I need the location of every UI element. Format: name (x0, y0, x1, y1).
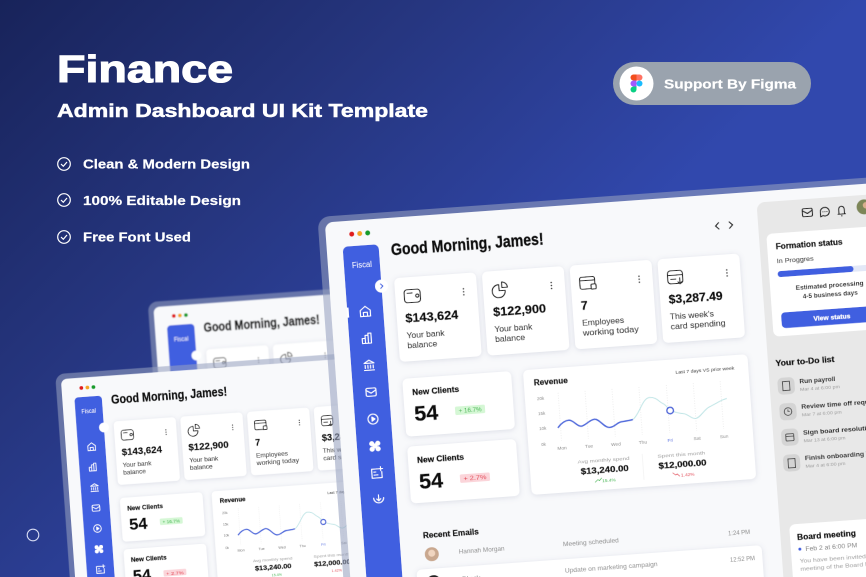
card: formation status: In Proggres (777, 256, 815, 265)
header icons (802, 206, 846, 219)
y axis labels: 10k (539, 426, 547, 431)
x axis labels: Fri (667, 438, 673, 444)
title: Finance (57, 49, 233, 91)
stat: spent this month (657, 450, 708, 480)
card: new clients up (402, 371, 515, 437)
panel: sidebar (342, 244, 413, 577)
panel: middle dashboard preview: Employees (256, 450, 288, 460)
panel: middle dashboard preview: Revenue (219, 496, 246, 505)
panel: middle dashboard preview: Fiscal (81, 408, 96, 416)
todo: time off (779, 396, 866, 421)
icon: figma logo (630, 74, 642, 92)
x axis labels: Thu (639, 440, 648, 446)
panel: middle dashboard preview: $12,000.00 (314, 559, 352, 568)
panel: middle dashboard preview: Wed (278, 546, 286, 550)
heading: greeting: Good Morning, James! (390, 229, 544, 259)
panel: middle dashboard preview: Sun (361, 540, 368, 544)
card: board meeting: Feb 2 at 6:00 PM (805, 543, 858, 553)
y axis labels: 15k (538, 411, 546, 416)
subtitle: Admin Dashboard UI Kit Template (57, 100, 428, 121)
todo: onboarding: Mar 4 at 6:00 pm (805, 461, 846, 470)
stat card: employees: 7 (580, 298, 588, 313)
panel: middle dashboard preview: Good Morning, James! (111, 384, 228, 407)
panel: middle dashboard preview: Tue (258, 547, 265, 551)
todo: board resolution (781, 423, 866, 446)
panel: middle dashboard preview: This week's (323, 446, 356, 455)
panel: middle dashboard preview: Spent this month (313, 552, 350, 559)
window control dots (349, 230, 370, 237)
button: view status: View status (813, 313, 851, 323)
x axis labels: Sat (693, 436, 702, 442)
card: new clients up: + 16.7% (458, 407, 483, 415)
nav arrows (715, 221, 733, 230)
panel: middle dashboard preview: 7 (255, 437, 261, 448)
stat: avg monthly spend: Avg monthly spend (577, 456, 630, 465)
card: new clients down: 54 (418, 469, 444, 494)
email row 2 (416, 545, 764, 577)
panel: middle dashboard preview: card spending (323, 453, 365, 462)
stat card: card spending: $3,287.49 (668, 289, 723, 307)
to-do items (777, 371, 866, 472)
stat: spent this month: Spent this month (657, 450, 706, 459)
y axis labels: 20k (537, 396, 545, 401)
panel: middle dashboard preview: New Clients (131, 554, 168, 564)
sidebar toggle (375, 279, 388, 293)
panel: middle dashboard preview: Last 7 days VS prior week (327, 488, 372, 495)
progress bar (777, 264, 866, 277)
stat card: bank balance: balance (407, 339, 438, 350)
y axis labels: 0k (541, 442, 547, 447)
stat card: bank balance 2: balance (495, 333, 526, 344)
panel: middle dashboard preview: Sat (341, 541, 347, 546)
panel: middle dashboard preview: 54 (129, 516, 148, 534)
panel: middle dashboard preview (55, 350, 414, 577)
y axis labels (537, 396, 548, 447)
stat card: bank balance 2: Your bank (494, 322, 534, 334)
stat: avg monthly spend: 15.4% (602, 477, 617, 484)
feature: free font: Free Font Used (83, 230, 191, 245)
chart marker (667, 407, 674, 414)
card: new clients up: New Clients (412, 385, 460, 397)
panel: middle dashboard preview: + 16.7% (162, 519, 180, 525)
card: formation status: Formation status (775, 238, 843, 251)
card: board meeting (789, 516, 866, 577)
window background (325, 180, 866, 577)
email row 1: Hannah Morgan (459, 546, 505, 556)
window frame (317, 174, 866, 577)
panel: back dashboard preview: Fiscal (174, 336, 189, 344)
todo: onboarding (783, 448, 866, 472)
stat card: bank balance 2: $122,900 (493, 301, 547, 319)
panel: middle dashboard preview: Fri (321, 543, 326, 547)
panel: main dashboard (317, 173, 866, 577)
todo: board resolution: Mar 13 at 6:00 pm (803, 435, 846, 444)
stat card: employees: Employees (582, 316, 624, 328)
panel: middle dashboard preview: $3,287.49 (321, 430, 363, 443)
stat card: bank balance: $143,624 (405, 308, 459, 325)
panel: middle dashboard preview: balance (190, 463, 214, 472)
figma support pill: Support By Figma (664, 76, 797, 92)
panel: middle dashboard preview: New Clients (127, 503, 164, 512)
email row 1: Meeting scheduled (563, 538, 619, 548)
decorative ring (27, 529, 39, 541)
panel: middle dashboard preview: 1.42% (331, 568, 343, 573)
card: new clients down: New Clients (417, 453, 465, 465)
stat card: card spending: This week's (670, 309, 714, 322)
panel: middle dashboard preview: Your bank (122, 460, 153, 469)
panel: right rail (757, 190, 866, 577)
todo: time off: Mar 7 at 6:00 pm (802, 410, 842, 419)
panel: middle dashboard preview: 15k (223, 522, 229, 527)
chart card: revenue: Last 7 days VS prior week (675, 366, 735, 376)
panel: middle dashboard preview: balance (123, 468, 147, 477)
panel: back dashboard preview (148, 280, 463, 474)
email row 1 (424, 524, 750, 562)
stat: spent this month: $12,000.00 (658, 458, 707, 471)
panel: back dashboard preview: Good Morning, James! (203, 312, 320, 335)
x axis labels: Sun (720, 434, 729, 440)
chart card: revenue: Revenue (534, 376, 569, 387)
sidebar brand: Fiscal (352, 260, 372, 270)
stat card: bank balance 2 (482, 266, 570, 356)
feature: clean and modern: Clean & Modern Design (83, 156, 250, 172)
x axis labels: Mon (557, 445, 567, 452)
stat card: bank balance (394, 272, 482, 362)
card: formation status (766, 225, 866, 337)
x axis labels: Wed (611, 441, 621, 448)
stat card: card spending: card spending (670, 319, 726, 332)
feature list (58, 156, 250, 245)
stat card: employees: working today (581, 325, 639, 338)
panel: middle dashboard preview: Avg monthly spend (253, 556, 293, 563)
card: new clients down: + 2.7% (463, 475, 488, 483)
panel: middle dashboard preview: $143,624 (121, 444, 163, 457)
panel: middle dashboard preview: + 2.7% (166, 570, 184, 576)
card: new clients down (407, 439, 520, 504)
todo: run payroll (777, 374, 840, 395)
card: board meeting: Board meeting (797, 528, 856, 542)
stat card: employees (570, 260, 657, 349)
feature: editable: 100% Editable Design (83, 193, 241, 208)
x axis labels (557, 434, 729, 452)
x axis labels: Tue (585, 443, 594, 450)
stat: avg monthly spend: $13,240.00 (580, 464, 630, 476)
panel: middle dashboard preview: 0k (225, 546, 229, 550)
card: new clients up: 54 (413, 401, 439, 426)
email row 1: 1:24 PM (728, 530, 750, 537)
card: formation status: 4-5 business days (803, 290, 858, 301)
panel: middle dashboard preview: $122,900 (188, 439, 229, 452)
section: recent emails (414, 507, 764, 577)
panel: middle dashboard preview: Mon (238, 548, 245, 553)
user avatar (856, 199, 866, 215)
panel: middle dashboard preview: 10k (224, 534, 230, 538)
chart card: revenue (523, 354, 756, 495)
stat card: bank balance: Your bank (406, 329, 446, 340)
todo: run payroll: Run payroll (799, 376, 836, 385)
todo: run payroll: Mar 4 at 6:00 pm (800, 384, 840, 393)
stat card: card spending (657, 253, 745, 343)
panel: middle dashboard preview: 20k (222, 511, 228, 515)
panel: middle dashboard preview: $13,240.00 (255, 563, 292, 573)
stat: spent this month: 1.42% (681, 472, 696, 479)
section: recent emails: Recent Emails (423, 527, 480, 540)
panel: middle dashboard preview: working today (255, 457, 300, 467)
stat: avg monthly spend (577, 456, 632, 486)
panel: middle dashboard preview: Your bank (189, 455, 219, 464)
figma support pill (613, 62, 811, 105)
panel: middle dashboard preview: Thu (299, 544, 306, 549)
heading: to-do list: Your to-Do list (775, 354, 835, 368)
email row 2: Update on marketing campaign (565, 562, 658, 575)
sidebar icons (360, 306, 385, 503)
card: formation status: Estimated processing (795, 280, 864, 292)
email row 2: 12:52 PM (730, 556, 755, 564)
revenue line (556, 392, 728, 431)
